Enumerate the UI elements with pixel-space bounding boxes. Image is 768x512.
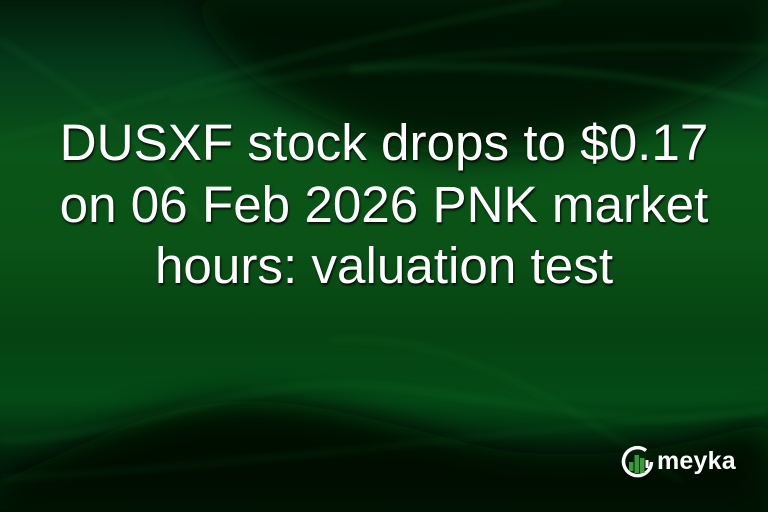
- title: [60, 114, 710, 294]
- logo wordmark: meyka: [657, 447, 736, 475]
- title: on 06 Feb 2026 PNK market: [60, 176, 708, 232]
- icon: meyka ring with bars: [622, 446, 654, 478]
- title: hours: valuation test: [155, 237, 613, 294]
- title: DUSXF stock drops to $0.17: [60, 114, 708, 171]
- logo: meyka: [622, 446, 736, 478]
